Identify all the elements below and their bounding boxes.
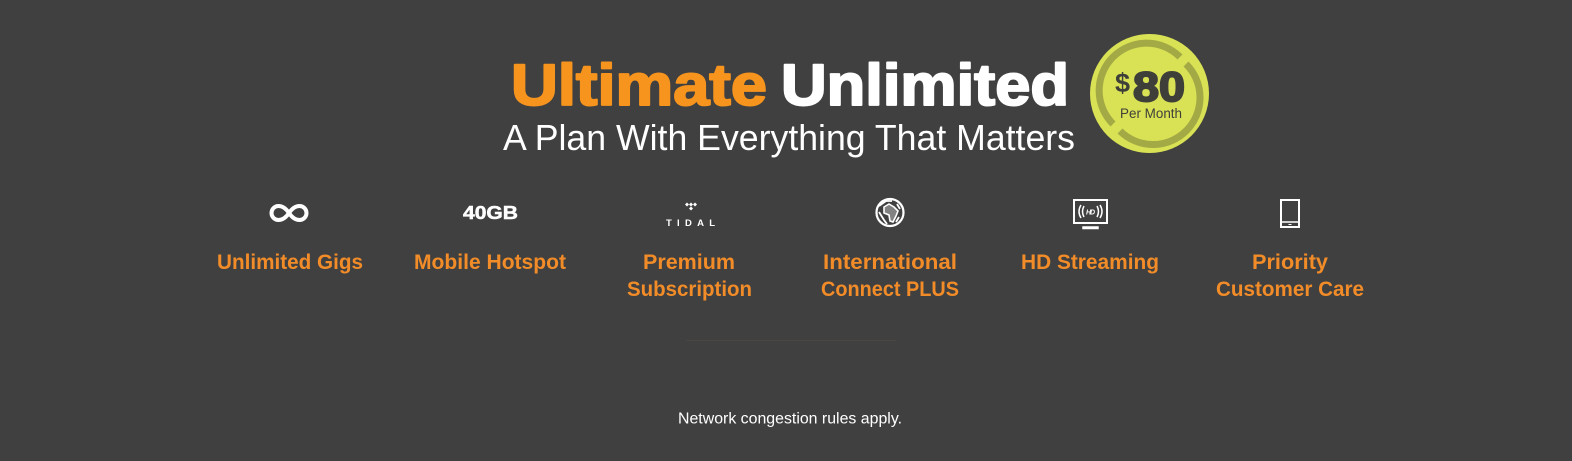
feature: mobile hotspot [414, 203, 566, 274]
feature: priority customer care [1216, 200, 1364, 301]
feature: hd streaming [1021, 200, 1159, 274]
feature: mobile hotspot: Mobile Hotspot [414, 251, 566, 274]
feature: priority customer care: Priority [1252, 251, 1328, 274]
feature: premium subscription: Premium [643, 251, 735, 274]
icon: tidal: TIDAL [666, 218, 715, 229]
feature: unlimited gigs [217, 206, 363, 274]
feature: premium subscription [627, 202, 752, 301]
icon: 40GB: 40GB [463, 203, 518, 223]
feature: international connect plus: Connect PLUS [821, 278, 959, 301]
icon: infinity [272, 206, 307, 220]
title: Unlimited [781, 53, 1069, 118]
subtitle: A Plan With Everything That Matters [503, 117, 1075, 158]
title [511, 53, 1069, 118]
title: Ultimate [511, 53, 767, 118]
icon: hd tv: HD [1086, 210, 1095, 216]
feature: unlimited gigs: Unlimited Gigs [217, 251, 363, 274]
feature: international connect plus [821, 199, 959, 301]
price badge [1090, 34, 1209, 153]
price badge: $ [1115, 68, 1130, 98]
feature: premium subscription: Subscription [627, 278, 752, 301]
feature: international connect plus: International [823, 251, 957, 274]
feature: priority customer care: Customer Care [1216, 278, 1364, 301]
footnote: Network congestion rules apply. [678, 410, 902, 428]
icon: globe [876, 199, 904, 226]
icon: phone [1281, 200, 1299, 227]
price badge: 80 [1133, 63, 1185, 110]
price badge: Per Month [1120, 106, 1182, 121]
feature: hd streaming: HD Streaming [1021, 251, 1159, 274]
